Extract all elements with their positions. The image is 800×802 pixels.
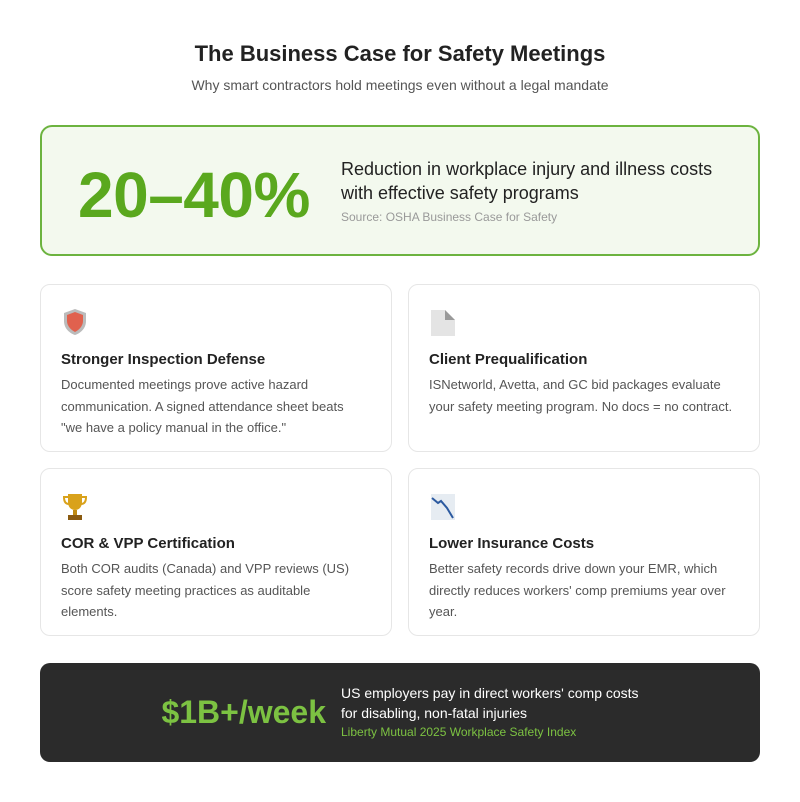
icon: shield <box>64 309 86 335</box>
stat description: Reduction in workplace injury and illness costs with effective safety programs <box>341 159 712 203</box>
card: COR & VPP: COR & VPP Certification <box>61 535 235 552</box>
card: inspection defense: Stronger Inspection Defense <box>61 351 265 368</box>
callout text <box>341 685 639 739</box>
card: COR & VPP <box>40 468 392 636</box>
card: lower insurance <box>408 468 760 636</box>
card: client prequalification <box>408 284 760 452</box>
card: inspection defense <box>40 284 392 452</box>
bottom dark callout <box>40 663 760 762</box>
card: client prequalification: ISNetworld, Avetta, and GC bid packages evaluate your safety meeting program. No docs = no contract. <box>429 377 732 414</box>
card: COR & VPP: Both COR audits (Canada) and VPP reviews (US) score safety meeting practices as auditable elements. <box>61 561 349 619</box>
icon: chart down <box>431 494 455 520</box>
callout text: Liberty Mutual 2025 Workplace Safety Index <box>341 725 576 739</box>
hero stat panel <box>40 125 760 256</box>
card: lower insurance: Lower Insurance Costs <box>429 535 594 552</box>
big stat: 20–40% <box>78 159 310 231</box>
stat description <box>341 159 712 224</box>
card: client prequalification: Client Prequalification <box>429 351 587 368</box>
callout text: US employers pay in direct workers' comp costs for disabling, non-fatal injuries <box>341 685 639 721</box>
callout stat: $1B+/week <box>161 694 326 730</box>
icon: document <box>431 310 455 336</box>
subtitle: Why smart contractors hold meetings even without a legal mandate <box>191 77 609 93</box>
card: inspection defense: Documented meetings prove active hazard communication. A signed attendance sheet beats "we have a policy manual in the office." <box>61 377 344 435</box>
card: lower insurance: Better safety records drive down your EMR, which directly reduces workers' comp premiums year over year. <box>429 561 726 619</box>
stat description: Source: OSHA Business Case for Safety <box>341 210 557 224</box>
icon: trophy <box>63 494 87 520</box>
title: The Business Case for Safety Meetings <box>195 41 605 66</box>
